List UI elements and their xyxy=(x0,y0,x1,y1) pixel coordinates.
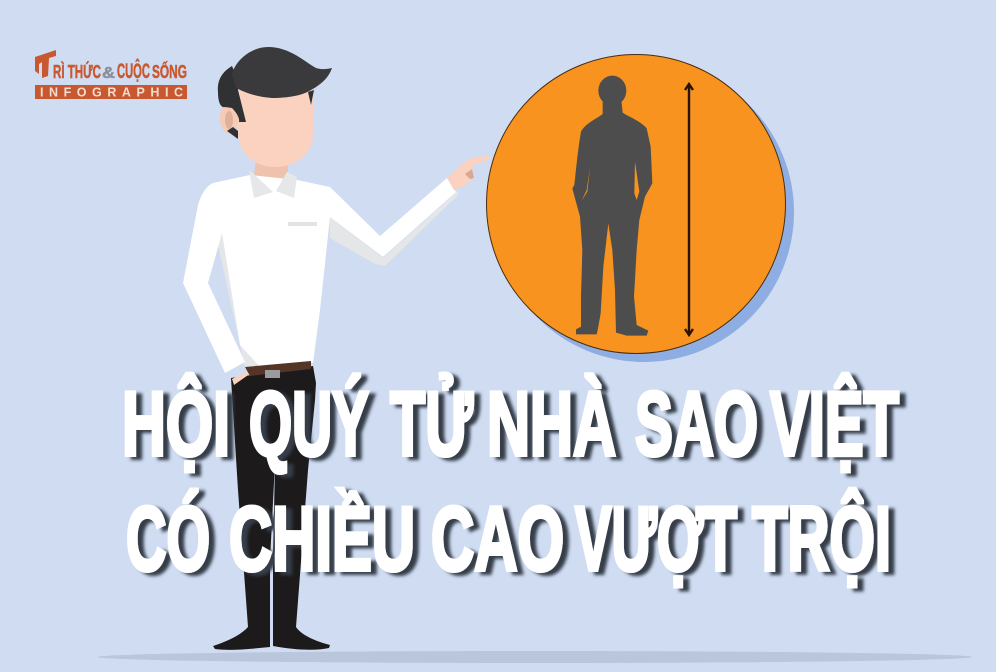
title line 1: NHÀ xyxy=(487,374,616,475)
title line 1: VIỆT xyxy=(770,373,899,475)
height arrow xyxy=(685,84,693,335)
pocket xyxy=(288,222,317,226)
title line 2: CAO xyxy=(431,489,564,590)
logo T mark xyxy=(35,50,56,78)
man figure xyxy=(183,47,490,650)
logo xyxy=(35,50,187,100)
logo wordmark xyxy=(53,59,187,83)
title line 1: SAO xyxy=(635,374,758,475)
title line 1: TỬ xyxy=(390,373,473,475)
title line 2: CÓ xyxy=(126,489,210,590)
face xyxy=(238,85,313,167)
ground shadow xyxy=(98,651,972,663)
logo wordmark: CUỘC xyxy=(117,59,150,83)
title line 2 xyxy=(126,488,891,590)
trousers xyxy=(213,366,330,650)
shirt xyxy=(183,175,456,373)
title line 2: VƯỢT xyxy=(575,489,737,590)
logo wordmark: RÌ THỨC xyxy=(53,61,101,82)
title xyxy=(122,373,899,590)
shirt shadow xyxy=(217,190,458,369)
hair xyxy=(218,47,332,139)
orange circle xyxy=(486,54,786,354)
title line 1: HỘI xyxy=(122,373,230,475)
title line 2: CHIỀU xyxy=(229,488,415,590)
logo infographic bar: INFOGRAPHIC xyxy=(40,86,183,100)
collar xyxy=(249,170,297,198)
neck xyxy=(254,158,288,194)
circle height illustration xyxy=(486,54,794,362)
title line 1: QUÝ xyxy=(249,374,369,475)
man silhouette xyxy=(572,76,652,336)
title line 1 xyxy=(122,373,899,475)
circle shadow xyxy=(494,62,794,362)
belt xyxy=(245,361,311,378)
logo wordmark: & xyxy=(102,65,115,82)
ear xyxy=(220,103,238,133)
title line 2: TRỘI xyxy=(752,488,891,590)
left hand in pocket xyxy=(232,371,251,385)
logo wordmark: SỐNG xyxy=(152,61,187,82)
pointing hand xyxy=(447,156,490,190)
